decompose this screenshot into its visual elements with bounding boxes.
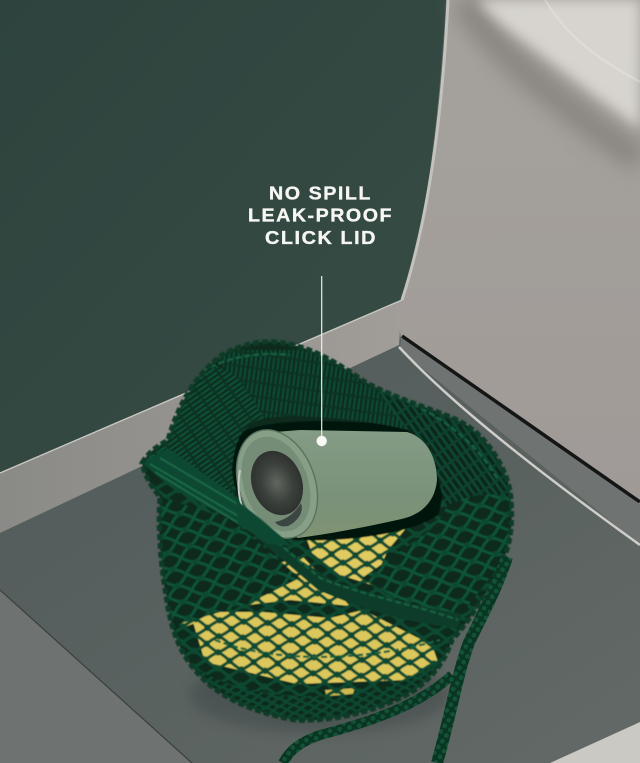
bag silhouette [142,342,512,720]
diagonal fold band: strands [150,457,242,527]
callout leader line [321,276,323,441]
seat surface [0,345,640,763]
diagonal fold band: thin right section [258,538,461,628]
rim back top [215,350,408,430]
seat side rail with white trim [399,336,640,545]
bottle [222,418,437,550]
lower yellow fabric [190,610,438,684]
bottle lid rim [222,418,332,550]
background: grey seat back panel [400,0,640,505]
front fold right [362,494,512,613]
bottle body [238,430,437,538]
bottle lid silver edge [238,470,250,520]
small yellow patch [324,687,356,697]
ledge between wall and seat [0,300,402,533]
metal cap [242,443,312,523]
callout text: no spill leak-proof click lid [248,184,393,248]
upper yellow fabric [307,527,407,585]
left side net [155,495,300,625]
rim back left [146,366,264,494]
callout text: no spill leak-proof click lid: LEAK-PROOF [248,206,393,226]
seat recess lighter area, lower left [0,590,192,763]
callout dot [316,436,327,446]
left yellow sliver [181,620,194,627]
bag strap bottom [283,675,452,763]
opening shadow [232,421,443,540]
callout text: no spill leak-proof click lid: NO SPILL [269,184,372,204]
background: dark green wall [0,0,446,473]
middle yellow fabric [249,556,350,607]
white seat corner, lower right [550,722,640,763]
bottle lid face [229,427,323,541]
rim back right [374,386,510,504]
woven green net bag [142,342,520,730]
lid slot [275,503,302,526]
thin highlight strands [175,354,498,657]
bag shadow [190,657,450,733]
bag strap right [437,557,507,763]
diagonal fold band: thick left section [144,448,244,521]
dense bottom rows [194,660,441,720]
net over bag body [150,480,520,730]
callout text: no spill leak-proof click lid: CLICK LID [265,228,377,248]
net band crossing bottle front [236,500,292,546]
bumpy bag edge [142,342,512,720]
